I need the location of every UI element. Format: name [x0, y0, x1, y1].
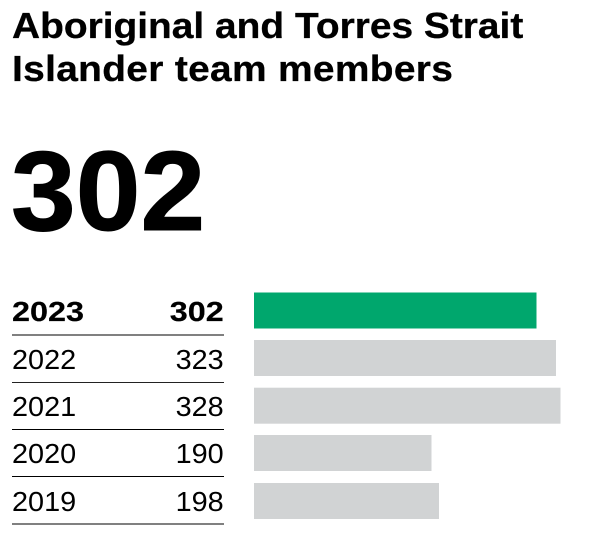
row 2022: 2022: [12, 344, 76, 375]
headline number: 302: [11, 128, 205, 254]
row 2023: [12, 292, 536, 336]
row 2021: 328: [176, 391, 224, 422]
row 2020: [12, 435, 432, 477]
title: Aboriginal and Torres Strait: [12, 5, 523, 46]
row 2019: [12, 483, 439, 525]
row 2022: 323: [176, 344, 224, 375]
row 2022: [12, 340, 556, 383]
row 2021: [12, 388, 560, 430]
table and bar chart: [12, 292, 560, 525]
row 2019: 198: [176, 486, 224, 517]
title: [12, 5, 523, 89]
row 2021: 2021: [12, 391, 76, 422]
row 2020: 190: [176, 438, 224, 469]
row 2023: 302: [170, 296, 224, 327]
row 2023: 2023: [12, 296, 84, 327]
title: Islander team members: [12, 48, 453, 89]
row 2020: 2020: [12, 438, 76, 469]
row 2019: 2019: [12, 486, 76, 517]
